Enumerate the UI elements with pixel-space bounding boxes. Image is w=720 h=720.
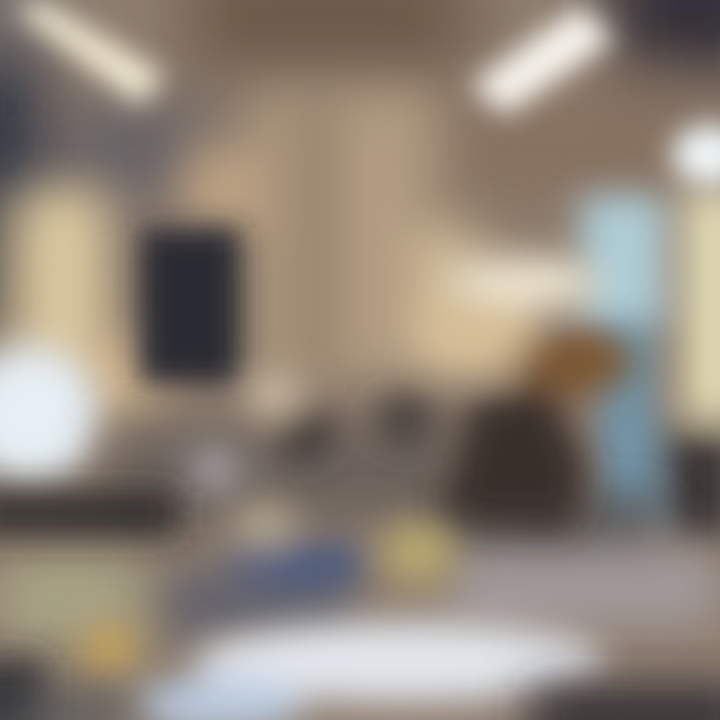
dark doorway [140,228,240,383]
bright white foreground shape [135,622,605,720]
lower scene mid tones [0,425,720,645]
ceiling and upper wall tones [0,0,720,220]
white rounded shape on the left [0,345,100,485]
right wall and pale blue column [580,190,720,540]
dark lower right corner [0,688,720,720]
dark band across lower left [0,492,180,720]
cream lit shape and brown figure on the right [189,257,635,530]
central wall [185,90,485,380]
left wall [0,190,160,420]
blue and yellow accents [82,501,456,674]
ceiling lights [15,0,720,185]
